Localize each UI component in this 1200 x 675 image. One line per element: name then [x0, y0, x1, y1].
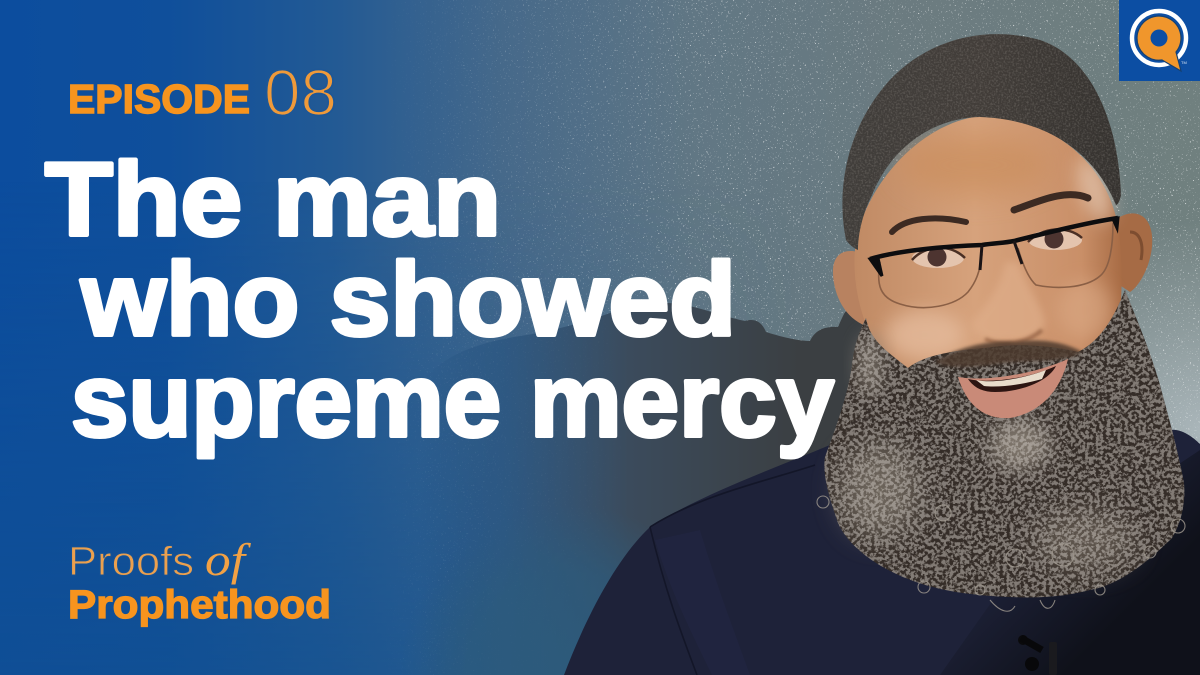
ears: [833, 213, 1152, 326]
face shading: [885, 135, 1119, 360]
starfield: [403, 0, 1200, 675]
mountain silhouette: [400, 300, 880, 675]
beard curls: [817, 496, 1185, 611]
title: who showed: [80, 242, 736, 358]
presenter: [564, 34, 1200, 675]
series name: Prophethood: [68, 583, 331, 627]
logo: TM: [1181, 60, 1187, 65]
episode label: 08: [264, 56, 337, 129]
series name: Proofs: [68, 538, 194, 584]
beard: [817, 290, 1185, 611]
shirt: [564, 430, 1200, 675]
logo: [1119, 0, 1200, 81]
sky glow: [950, 200, 1200, 675]
eyes: [912, 229, 1082, 268]
glasses: [870, 218, 1118, 308]
cap: [842, 34, 1121, 250]
microphone: [1018, 635, 1057, 675]
eyebrows: [892, 195, 1088, 232]
episode label: EPISODE: [68, 76, 250, 122]
title: supreme mercy: [71, 343, 834, 459]
title: The man: [45, 142, 501, 258]
title: [45, 142, 834, 459]
episode label: [68, 56, 337, 129]
moustache shadow: [935, 340, 1082, 367]
mouth: [958, 359, 1068, 418]
face: [854, 116, 1122, 440]
series name: [68, 534, 331, 627]
lower background tint: [0, 320, 568, 675]
series name: of: [205, 534, 252, 585]
